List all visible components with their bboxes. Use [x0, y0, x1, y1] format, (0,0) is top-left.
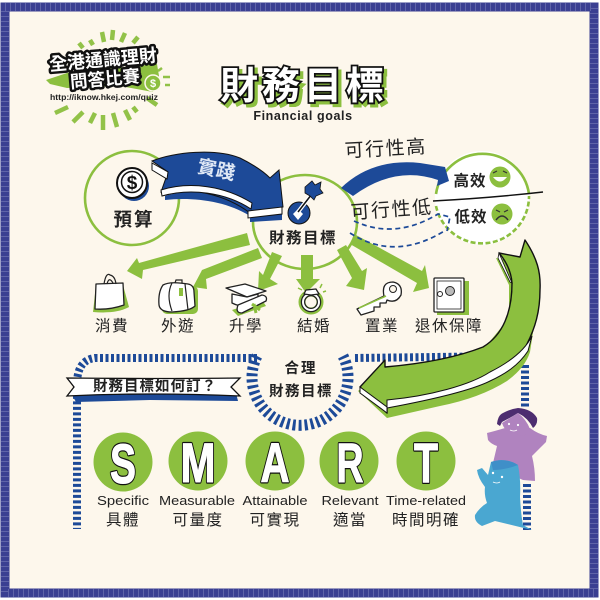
SMART circle A: A [260, 431, 290, 494]
badge label line 1: 全港通識理財 [48, 45, 158, 75]
arrow to shopping [127, 233, 250, 279]
badge label line 2: 問答比賽 [69, 66, 141, 92]
high feasibility label: 可行性高 [344, 136, 427, 162]
badge dollar icon: $ [150, 78, 156, 90]
icon: diamond ring [298, 284, 326, 311]
reasonable goals label: 財務目標 [269, 382, 333, 400]
icon: key [357, 282, 401, 315]
dashed arrows: low feasibility [350, 214, 450, 247]
life goal labels: 置業 [365, 317, 399, 335]
arrow to travel [193, 248, 262, 289]
title: 財務目標 [220, 66, 388, 108]
SMART circle M: M [180, 431, 216, 494]
badge green brush [46, 64, 159, 92]
big green arrow [358, 240, 540, 418]
icon: coin: $ [127, 173, 138, 194]
central label: 財務目標 [269, 229, 337, 247]
icon: coin [117, 168, 149, 201]
SMART circle R: R [336, 431, 364, 494]
SMART circle S: S [110, 432, 136, 495]
arrow: practice ribbon: 實踐 [195, 155, 237, 185]
SMART circle R: R [336, 431, 364, 494]
SMART labels: 適當 [333, 511, 367, 529]
high efficiency label: 高效 [453, 171, 487, 190]
life goal labels: 結婚 [297, 317, 331, 335]
circle: financial goals [253, 175, 357, 269]
life goal labels: 消費 [95, 317, 129, 335]
badge label line 1: 全港通識理財 [48, 45, 158, 75]
arrows to life goals [127, 233, 429, 293]
subtitle: Financial goals [253, 109, 353, 123]
arrow: high feasibility [341, 162, 449, 196]
life goal labels: 升學 [229, 316, 263, 335]
results circle [435, 151, 529, 245]
arrow to retirement [350, 235, 429, 292]
icon: sad face [492, 204, 512, 224]
character: purple figure [487, 408, 547, 481]
question banner [67, 377, 240, 402]
SMART circle R [320, 431, 378, 494]
SMART labels: Attainable [242, 493, 308, 508]
SMART labels: 具體 [106, 511, 140, 529]
reasonable goals label: 合理 [284, 359, 318, 377]
title: 財務目標 [223, 69, 391, 111]
SMART labels: Measurable [159, 493, 235, 508]
arrow: practice ribbon [152, 152, 283, 222]
divider line [433, 192, 543, 201]
icon: shopping bag [93, 274, 129, 312]
life goal labels: 退休保障 [415, 317, 483, 335]
question banner: 財務目標如何訂？ [93, 377, 217, 395]
badge sun rays [55, 30, 170, 130]
reasonable goals label [269, 359, 333, 400]
SMART circle A [246, 431, 304, 494]
budget label: 預算 [113, 209, 155, 230]
SMART labels: Time-related [386, 493, 466, 508]
circle: budget [85, 151, 179, 245]
SMART labels: Relevant [322, 493, 379, 508]
dashed frame [77, 356, 527, 530]
badge url: http://iknow.hkej.com/quiz [50, 92, 158, 102]
SMART circle M: M [180, 431, 216, 494]
character: blue figure [475, 460, 532, 530]
badge: quiz logo [46, 30, 170, 130]
SMART labels: 時間明確 [392, 511, 460, 529]
icon: dart and target [288, 181, 323, 224]
arrow to education [258, 252, 282, 291]
SMART circle S: S [110, 432, 136, 495]
SMART labels [97, 493, 466, 529]
low feasibility label: 可行性低 [350, 196, 433, 224]
SMART labels: 可實現 [249, 510, 301, 529]
SMART labels: 可量度 [172, 511, 224, 529]
badge label line 2: 問答比賽 [69, 66, 141, 92]
arrow to property [337, 245, 367, 290]
icon: happy face [490, 166, 510, 188]
icon: suitcase [159, 280, 198, 314]
SMART circle S [94, 432, 152, 495]
low efficiency label: 低效 [454, 207, 488, 226]
icon: safe [434, 278, 469, 315]
SMART circle T: T [414, 431, 438, 494]
arrow to marriage [296, 255, 320, 293]
SMART circle A: A [260, 431, 290, 494]
SMART circle T [396, 431, 456, 494]
SMART labels: Specific [97, 493, 150, 508]
life goal labels [95, 316, 483, 335]
life goal labels: 外遊 [161, 317, 195, 335]
SMART circle T: T [414, 431, 438, 494]
icon: graduation cap and diploma [226, 284, 266, 316]
